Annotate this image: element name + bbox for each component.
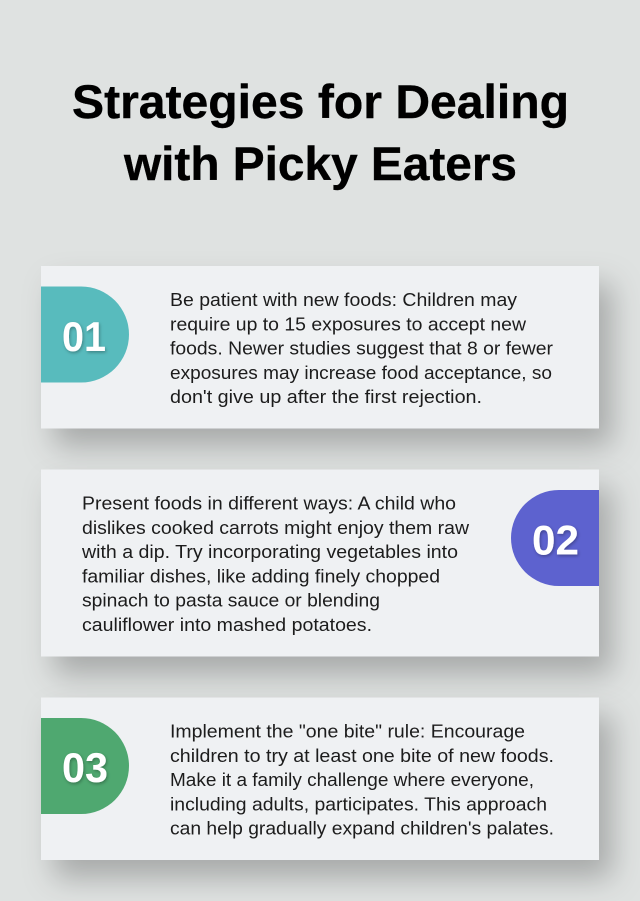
text block: present foods: cauliflower into mashed potatoes. [82, 615, 372, 635]
text block: be patient: require up to 15 exposures to accept new [170, 314, 527, 334]
panel: step 03 [41, 698, 599, 860]
title [72, 75, 569, 190]
text block: one bite: children to try at least one bite of new foods. [170, 746, 554, 766]
badge: 01 [41, 286, 129, 382]
text block: one bite: Make it a family challenge where everyone, [170, 770, 534, 790]
text block: one bite: Implement the "one bite" rule: Encourage [170, 722, 525, 742]
text block: be patient: exposures may increase food acceptance, so [170, 363, 552, 383]
text block: be patient [170, 290, 553, 407]
text block: present foods: familiar dishes, like adding finely chopped [82, 566, 440, 586]
text block: present foods [81, 494, 470, 635]
badge: 02 [511, 490, 599, 586]
card background 02 [41, 470, 599, 656]
text block: one bite: including adults, participates. This approach [170, 794, 547, 814]
title: Strategies for Dealing [72, 75, 569, 128]
text block: present foods: dislikes cooked carrots might enjoy them raw [82, 518, 470, 538]
card background 03 [41, 698, 599, 860]
badge: 03 [41, 718, 129, 814]
badge: 03: 03 [62, 744, 108, 791]
text block: present foods: spinach to pasta sauce or blending [82, 591, 380, 611]
card background 01 [41, 266, 599, 428]
text block: one bite [170, 722, 554, 839]
text block: be patient: foods. Newer studies suggest that 8 or fewer [170, 339, 553, 359]
panel: step 02 [41, 470, 599, 656]
title: with Picky Eaters [123, 137, 517, 190]
text block: one bite: can help gradually expand children's palates. [170, 819, 554, 839]
badge: 01: 01 [62, 313, 106, 360]
text block: be patient: Be patient with new foods: Children may [170, 290, 517, 310]
text block: be patient: don't give up after the first rejection. [170, 387, 482, 407]
text block: present foods: Present foods in different ways: A child who [82, 494, 456, 514]
panel: step 01 [41, 266, 599, 428]
text block: present foods: with a dip. Try incorporating vegetables into [81, 542, 458, 562]
badge: 02: 02 [532, 516, 579, 564]
